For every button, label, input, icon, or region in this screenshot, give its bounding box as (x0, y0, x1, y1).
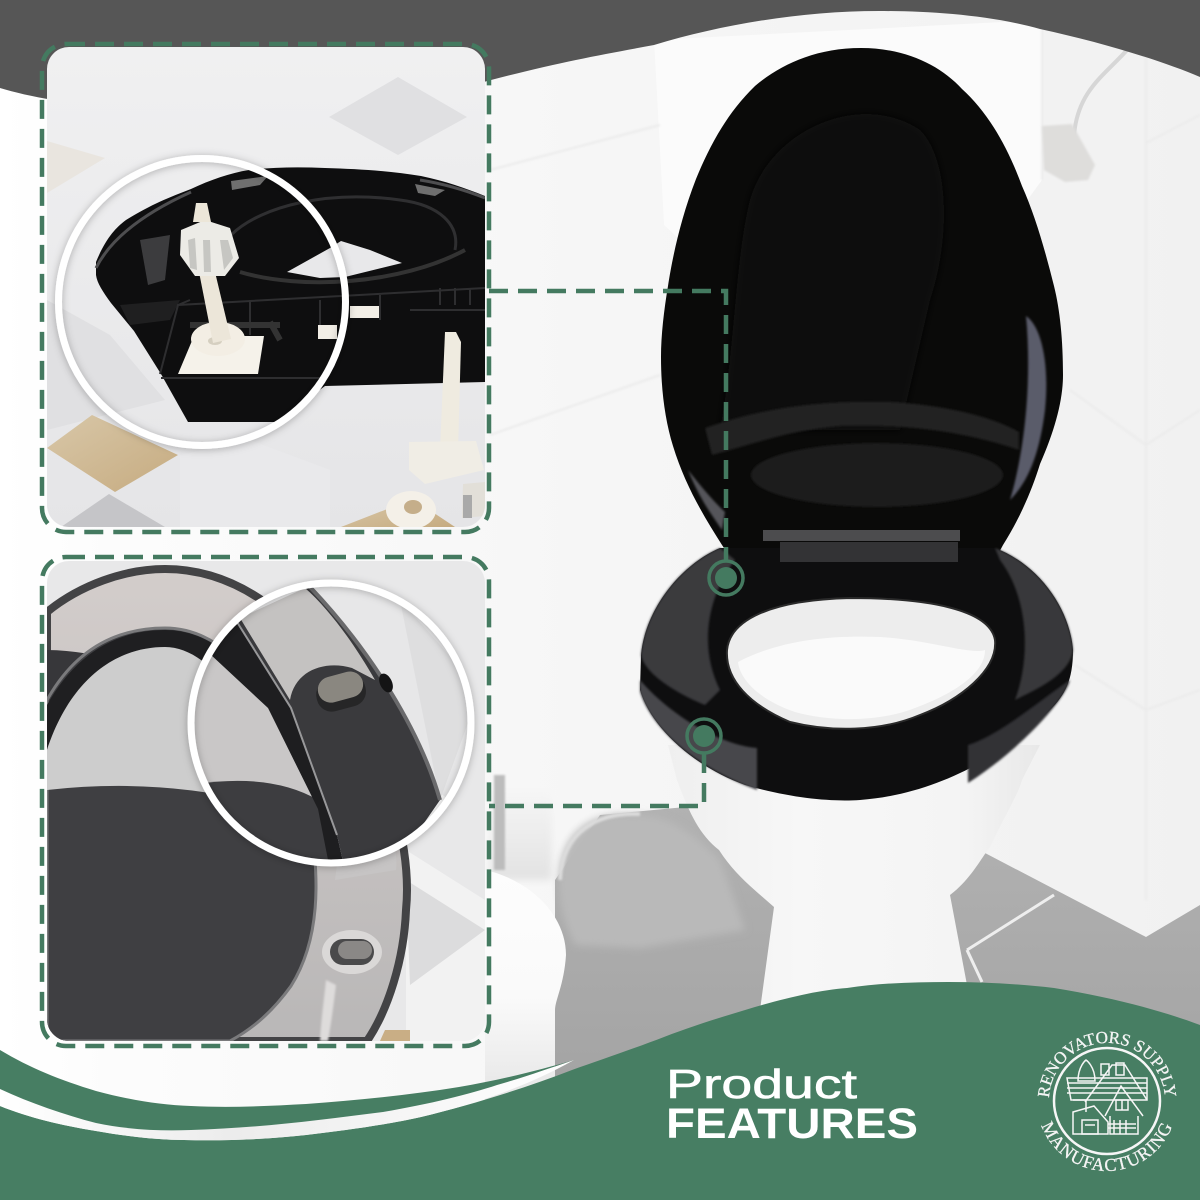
toilet seat lid (661, 48, 1063, 560)
lower left wall (490, 790, 552, 880)
zoom circle (58, 158, 346, 446)
loose square base (409, 441, 484, 484)
toilet bowl and pedestal (668, 745, 1040, 1010)
title: FEATURES (666, 1100, 918, 1148)
footer green swoosh (0, 1050, 574, 1130)
square base (178, 336, 264, 374)
loose nut (462, 482, 485, 518)
footer green wave (0, 982, 1200, 1200)
floor tile line (967, 895, 1054, 982)
circle dark lower (208, 780, 328, 860)
inner dark border (47, 630, 212, 750)
screw shaft (199, 272, 231, 343)
title (666, 1061, 918, 1148)
logo: Renovators Supply Manufacturing (1038, 1032, 1176, 1172)
tile joints (490, 30, 1200, 900)
bottom slot (322, 930, 382, 974)
panel: mounting hardware (42, 44, 489, 532)
connector: bottom panel to seat edge (489, 754, 704, 806)
logo house (1067, 1060, 1147, 1134)
seat left surface (641, 548, 735, 705)
inner silver reflection (47, 647, 206, 792)
logo bottom text: MANUFACTURING (1040, 1120, 1172, 1172)
logo top text: RENOVATORS SUPPLY (1038, 1032, 1176, 1098)
circle rim line (310, 587, 440, 800)
lid soft reflection (720, 114, 944, 430)
top dark band (0, 0, 1200, 108)
rim dark reflection (47, 650, 84, 696)
rubber bumper (316, 672, 366, 712)
logo ring (1054, 1048, 1160, 1154)
floor (555, 800, 1200, 1120)
loose ring (386, 491, 436, 529)
footer white swoosh band (0, 1060, 574, 1140)
lid ellipse reflection (751, 443, 1003, 507)
marker: seat hinge (709, 561, 743, 595)
zoom circle (191, 583, 471, 863)
lid blue highlight (1010, 316, 1046, 500)
washer (191, 323, 244, 342)
dashed frame (42, 44, 489, 532)
circle silver interior (194, 656, 312, 796)
circle rim area (237, 587, 440, 870)
panel: seat bumpers (42, 557, 489, 1046)
loose screw (440, 332, 461, 442)
cistern tank on wall (654, 20, 1042, 240)
seat opening (287, 241, 402, 278)
background triangles (406, 850, 485, 1041)
dashed frame (42, 557, 489, 1046)
white clips (318, 306, 379, 339)
hinge block (780, 542, 958, 562)
detail inside circle (208, 588, 468, 860)
connector: top panel to seat hinge (489, 291, 726, 560)
brush holder (559, 814, 745, 948)
wall pipe and valve (1042, 50, 1127, 182)
panel image (47, 561, 485, 1041)
inner recess (47, 628, 316, 1041)
screw tip (193, 203, 211, 222)
bowl water (738, 637, 985, 719)
sink shape lower left (485, 870, 566, 1100)
seat right surface (995, 548, 1073, 700)
toilet seat ring (640, 530, 1073, 800)
black seat underside (96, 167, 485, 422)
background diamonds (47, 77, 467, 527)
frame (160, 288, 485, 378)
marker: seat edge (687, 719, 721, 753)
seat front right face (968, 680, 1070, 783)
title: Product (666, 1061, 858, 1107)
adjuster nut (180, 220, 239, 276)
seat rim highlights (96, 180, 485, 268)
side pipe (494, 775, 505, 870)
lid arc reflection (705, 402, 1019, 455)
panel image (47, 47, 485, 529)
seat opening (727, 598, 995, 729)
hinge bar (763, 530, 960, 541)
seat front left face (640, 680, 757, 790)
circle band (210, 622, 345, 870)
lid rim (47, 569, 407, 1041)
